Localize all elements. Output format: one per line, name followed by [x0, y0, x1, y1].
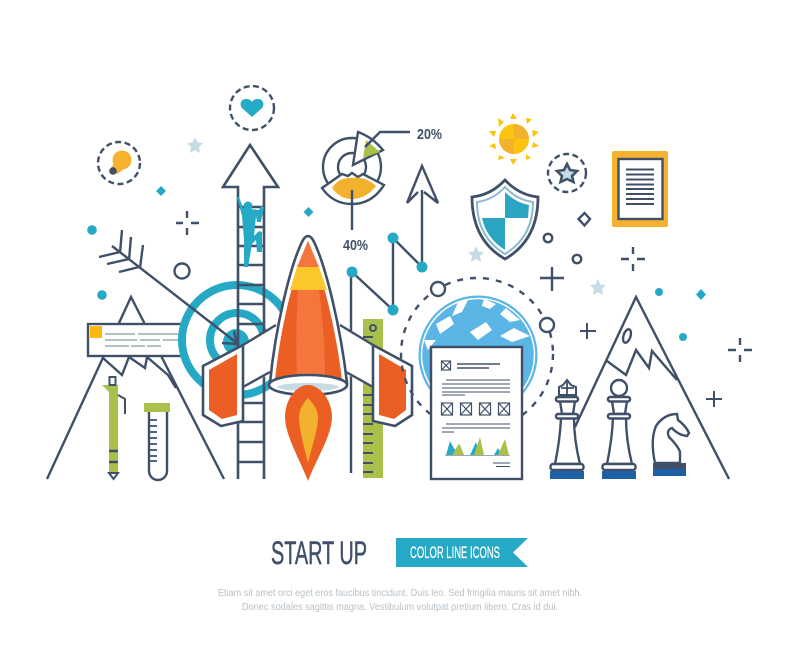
ribbon banner: [396, 538, 528, 567]
icon: sun: [489, 113, 539, 165]
icon: shield: [472, 180, 538, 259]
target: [182, 285, 292, 395]
sign board: [88, 324, 182, 356]
test tube: [144, 403, 170, 480]
right mountain: [575, 297, 729, 479]
caption text: Etiam sit amet orci eget eros faucibus tincidunt. Duis leo. Sed fringilia mauris sit amet nibh.: [218, 588, 582, 599]
rocket: [269, 236, 347, 395]
right wing: [340, 325, 412, 426]
report document: [431, 347, 522, 479]
caption text: Donec sodales sagittis magna. Vestibulum volutpat pretium libero. Cras id dui.: [242, 602, 558, 613]
teal dots and diamonds: [87, 186, 706, 341]
line chart arrow: [346, 166, 438, 473]
label: 40%: 40%: [343, 237, 368, 254]
pencil: [102, 377, 125, 479]
chess pawn: [602, 380, 636, 479]
pie chart: [322, 132, 410, 230]
left wing: [203, 325, 276, 426]
label: 20%: 20%: [417, 126, 442, 143]
climber: [237, 197, 264, 267]
solid plus signs: [540, 267, 722, 407]
icon: heart badge: [230, 86, 274, 130]
globe: [401, 278, 554, 430]
dashed plus signs: [176, 211, 752, 362]
ladder with arrow: [223, 145, 278, 479]
chess king: [550, 380, 584, 479]
caption text: [218, 588, 582, 613]
ruler: [363, 319, 383, 478]
bow arrow: [99, 230, 237, 344]
title: START UP: [271, 535, 367, 571]
illustration: start up line icons: [47, 86, 752, 481]
chess knight: [653, 414, 689, 476]
small rings: [174, 213, 590, 278]
left mountain: [47, 297, 224, 479]
light stars: [187, 137, 606, 295]
ribbon banner: COLOR LINE ICONS: [410, 543, 500, 562]
icon: star badge: [548, 154, 586, 192]
rocket flame: [285, 385, 332, 481]
icon: framed document: [612, 151, 668, 227]
icon: bulb badge: [98, 142, 140, 184]
